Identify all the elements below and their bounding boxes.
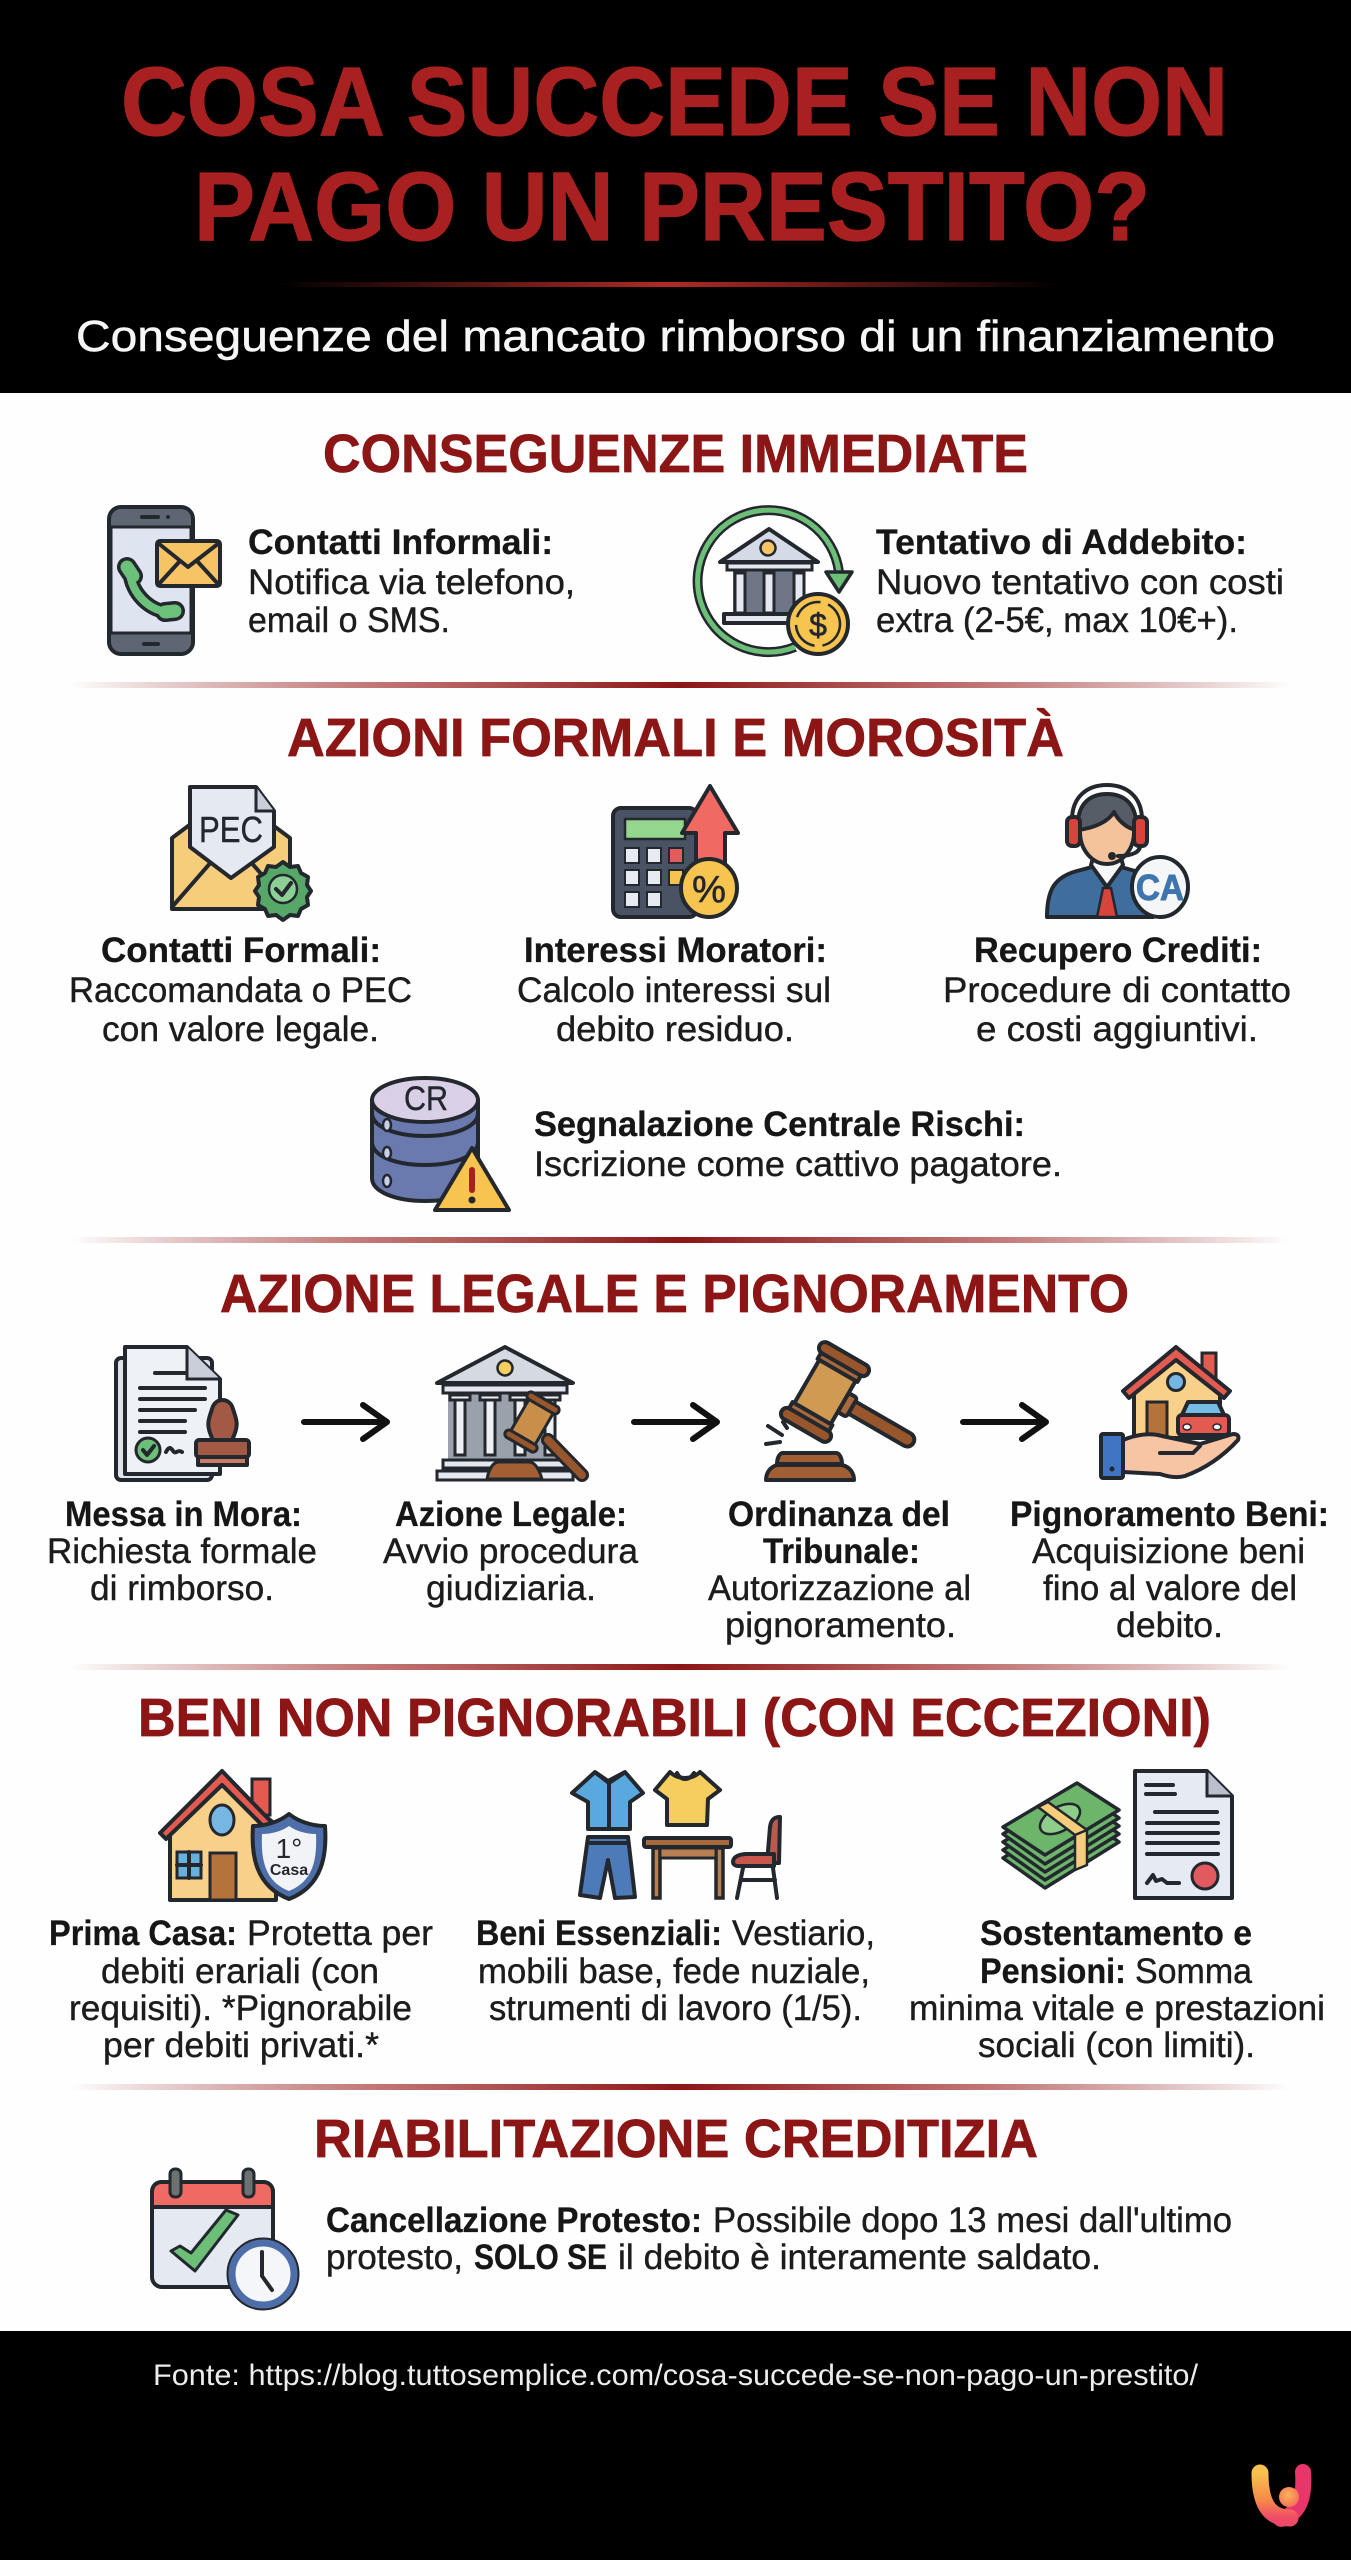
logo (1260, 2472, 1303, 2519)
text: prima casa: per debiti privati.* (103, 2026, 379, 2065)
text: segnalazione centrale rischi (534, 1105, 1062, 1184)
text: pignoramento beni: debito. (1116, 1606, 1223, 1645)
icon: clothes and furniture (572, 1772, 780, 1898)
text: prima casa: requisiti). *Pignorabile (69, 1989, 412, 2028)
text: contatti informali (248, 523, 575, 640)
text: beni essenziali: strumenti di lavoro (1/5). (489, 1989, 862, 2028)
text: prima casa: Protetta per (247, 1914, 433, 1953)
text: messa in mora: Richiesta formale (47, 1532, 317, 1571)
icon: document with stamp (116, 1347, 249, 1480)
icon: bank with coin: $ (809, 607, 827, 643)
icon: call center agent: CA (1136, 867, 1184, 908)
panel: azioni formali e morosita (69, 708, 1291, 1210)
heading: beni non pignorabili: BENI NON PIGNORABILI (CON ECCEZIONI) (138, 1688, 1211, 1748)
text: sostentamento e pensioni: sociali (con limiti). (978, 2026, 1255, 2065)
text: tentativo di addebito: Tentativo di Addebito: (876, 523, 1247, 562)
text: sostentamento e pensioni (909, 1914, 1325, 2065)
heading: riabilitazione creditizia: RIABILITAZIONE CREDITIZIA (314, 2109, 1038, 2169)
text: ordinanza del tribunale: pignoramento. (725, 1606, 956, 1645)
icon: house with shield (160, 1771, 325, 1900)
text: messa in mora: Messa in Mora: (65, 1495, 302, 1534)
heading: azioni formali e morosita: AZIONI FORMALI E MOROSITÀ (287, 708, 1064, 768)
heading: conseguenze immediate: CONSEGUENZE IMMEDIATE (323, 424, 1028, 484)
text: interessi moratori: Calcolo interessi sul (517, 971, 831, 1010)
text: cancellazione protesto: protesto, (326, 2238, 463, 2277)
text: ordinanza del tribunale: Tribunale: (763, 1532, 920, 1571)
subtitle: Conseguenze del mancato rimborso di un finanziamento (76, 312, 1275, 361)
icon: house with shield: 1° (276, 1833, 302, 1864)
title: COSA SUCCEDE SE NON (121, 47, 1228, 156)
text: beni essenziali: Beni Essenziali: (476, 1914, 722, 1953)
panel: riabilitazione creditizia (152, 2109, 1232, 2309)
icon: bank with coin (698, 510, 852, 654)
panel: conseguenze immediate (109, 424, 1284, 654)
panel: footer (0, 2331, 1351, 2560)
icon: database with warning (372, 1078, 509, 1210)
text: pignoramento beni: Acquisizione beni (1032, 1532, 1305, 1571)
text: azione legale: Azione Legale: (395, 1495, 627, 1534)
text: cancellazione protesto: SOLO SE (474, 2238, 607, 2277)
text: contatti formali (69, 931, 412, 1049)
text: messa in mora (47, 1495, 317, 1608)
icon: calendar with clock (152, 2169, 298, 2309)
text: tentativo di addebito (876, 523, 1284, 640)
text: pignoramento beni: fino al valore del (1043, 1569, 1297, 1608)
title (121, 47, 1228, 261)
text: cancellazione protesto (326, 2201, 1232, 2277)
text: prima casa: debiti erariali (con (101, 1952, 379, 1991)
icon: PEC envelope (172, 787, 311, 920)
text: recupero crediti: Procedure di contatto (943, 971, 1291, 1010)
icon: gavel (766, 1340, 935, 1481)
text: sostentamento e pensioni: Pensioni: (980, 1952, 1126, 1991)
icon: call center agent (1047, 785, 1188, 917)
title: PAGO UN PRESTITO? (194, 152, 1150, 261)
text: tentativo di addebito: Nuovo tentativo con costi (876, 563, 1284, 602)
icon: house and car on hand (1101, 1347, 1238, 1478)
text: contatti informali: Contatti Informali: (248, 523, 553, 562)
arrow (963, 1405, 1046, 1439)
panel: beni non pignorabili (49, 1688, 1325, 2065)
icon: PEC envelope: PEC (199, 809, 263, 850)
icon: calculator with rising arrow (613, 786, 738, 917)
text: ordinanza del tribunale (708, 1495, 971, 1645)
text: messa in mora: di rimborso. (90, 1569, 274, 1608)
text: sostentamento e pensioni: Sostentamento e (980, 1914, 1252, 1953)
text: pignoramento beni: Pignoramento Beni: (1010, 1495, 1329, 1534)
text: beni essenziali: mobili base, fede nuziale, (478, 1952, 870, 1991)
arrow (304, 1405, 387, 1439)
text: beni essenziali: Vestiario, (732, 1914, 875, 1953)
source line: Fonte: https://blog.tuttosemplice.com/cosa-succede-se-non-pago-un-prestito/ (153, 2359, 1199, 2392)
text: azione legale (383, 1495, 639, 1608)
text: sostentamento e pensioni: minima vitale e prestazioni (909, 1989, 1325, 2028)
text: recupero crediti: Recupero Crediti: (974, 931, 1262, 970)
text: ordinanza del tribunale: Ordinanza del (728, 1495, 950, 1534)
icon: courthouse with gavel (437, 1347, 582, 1480)
text: ordinanza del tribunale: Autorizzazione al (708, 1569, 971, 1608)
text: cancellazione protesto: Cancellazione Protesto: (326, 2201, 702, 2240)
arrow (634, 1405, 717, 1439)
heading: azione legale e pignoramento: AZIONE LEGALE E PIGNORAMENTO (220, 1264, 1129, 1324)
text: segnalazione centrale rischi: Iscrizione come cattivo pagatore. (534, 1145, 1062, 1184)
text: interessi moratori: Interessi Moratori: (524, 931, 827, 970)
text: prima casa (49, 1914, 433, 2065)
text: azione legale: giudiziaria. (426, 1569, 596, 1608)
text: cancellazione protesto: Possibile dopo 13 mesi dall'ultimo (713, 2201, 1232, 2240)
icon: database with warning: CR (404, 1080, 448, 1118)
icon: calculator with rising arrow: % (692, 869, 726, 911)
text: contatti formali: Contatti Formali: (101, 931, 381, 970)
text: recupero crediti (943, 931, 1291, 1049)
text: beni essenziali (476, 1914, 875, 2028)
text: tentativo di addebito: extra (2-5€, max 10€+). (876, 601, 1238, 640)
text: cancellazione protesto: il debito è interamente saldato. (618, 2238, 1101, 2277)
text: interessi moratori (517, 931, 831, 1049)
text: interessi moratori: debito residuo. (556, 1010, 794, 1049)
text: azione legale: Avvio procedura (383, 1532, 639, 1571)
text: contatti formali: con valore legale. (102, 1010, 379, 1049)
text: sostentamento e pensioni: Somma (1135, 1952, 1253, 1991)
text: segnalazione centrale rischi: Segnalazione Centrale Rischi: (534, 1105, 1025, 1144)
text: contatti informali: Notifica via telefono, (248, 563, 575, 602)
text: recupero crediti: e costi aggiuntivi. (976, 1010, 1258, 1049)
icon: phone with envelope (109, 507, 220, 654)
text: pignoramento beni (1010, 1495, 1329, 1645)
text: contatti formali: Raccomandata o PEC (69, 971, 412, 1010)
panel: header (0, 0, 1351, 393)
icon: house with shield: Casa (270, 1862, 308, 1879)
icon: money and document (1003, 1771, 1232, 1898)
text: contatti informali: email o SMS. (248, 601, 450, 640)
panel: azione legale e pignoramento (47, 1264, 1329, 1645)
text: prima casa: Prima Casa: (49, 1914, 237, 1953)
